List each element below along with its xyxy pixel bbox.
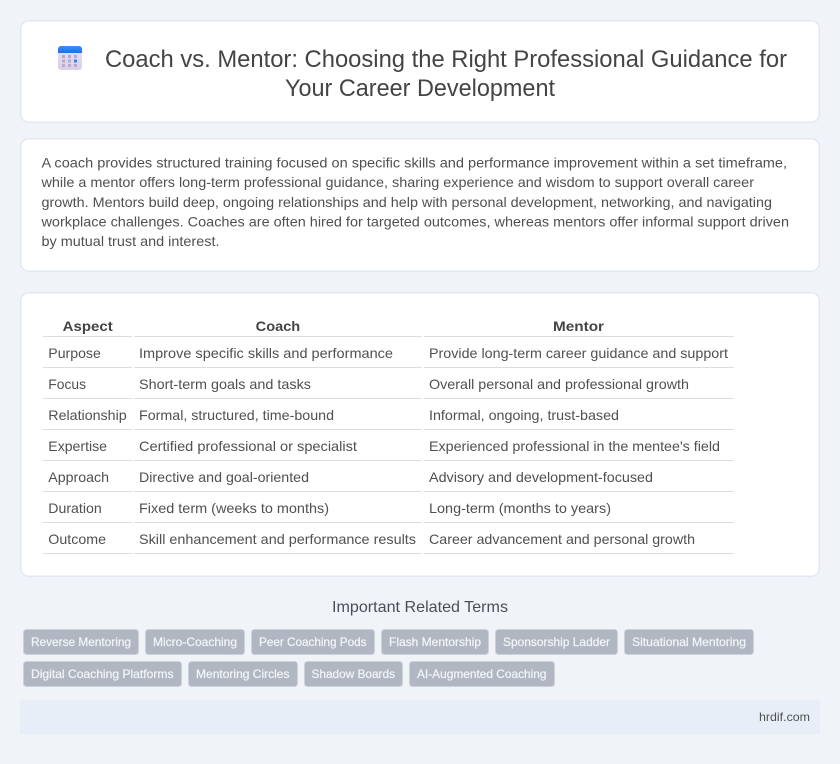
table row: focus	[48, 376, 689, 392]
table row: duration: Long-term (months to years)	[429, 500, 611, 516]
table row: focus: Short-term goals and tasks	[139, 376, 311, 392]
panel: introduction	[21, 139, 819, 271]
table row: purpose	[48, 345, 728, 361]
table row: expertise: Experienced professional in the mentee's field	[429, 438, 720, 454]
table row: outcome: Skill enhancement and performance results	[139, 531, 416, 547]
table row: purpose: Improve specific skills and performance	[139, 345, 393, 361]
table row: purpose: Purpose	[48, 345, 101, 361]
tag: Mentoring Circles: Mentoring Circles	[196, 667, 290, 681]
heading: Your Career Development	[285, 75, 555, 102]
table row: duration	[48, 500, 611, 516]
text block: summary paragraph: workplace challenges. Coaches are often hired for targeted outcomes, whereas mentors offer informal support driven	[40, 213, 789, 229]
tag: Flash Mentorship: Flash Mentorship	[389, 635, 481, 649]
tag: Situational Mentoring: Situational Mentoring	[632, 635, 746, 649]
table row: expertise: Expertise	[48, 438, 107, 454]
section: related terms	[24, 599, 754, 686]
tag: Micro-Coaching: Micro-Coaching	[153, 635, 237, 649]
heading	[105, 46, 787, 102]
table row: focus: Focus	[48, 376, 86, 392]
panel: comparison table	[21, 293, 819, 576]
table row: approach: Approach	[48, 469, 109, 485]
tag: Mentoring Circles	[188, 662, 298, 686]
table row: relationship	[48, 407, 619, 423]
tag: Reverse Mentoring	[24, 630, 138, 654]
tag: Reverse Mentoring: Reverse Mentoring	[31, 635, 131, 649]
table row: outcome: Outcome	[48, 531, 106, 547]
heading: Coach vs. Mentor: Choosing the Right Professional Guidance for	[105, 46, 787, 73]
table header row: Aspect	[63, 318, 113, 334]
table row: purpose: Provide long-term career guidance and support	[429, 345, 728, 361]
table row: relationship: Formal, structured, time-bound	[139, 407, 334, 423]
tag: Sponsorship Ladder	[496, 630, 618, 654]
text block: summary paragraph	[40, 154, 789, 249]
icon: calendar	[58, 46, 82, 70]
tag: Digital Coaching Platforms: Digital Coaching Platforms	[31, 667, 174, 681]
tag: Shadow Boards	[304, 662, 402, 686]
table row: approach: Advisory and development-focused	[429, 469, 653, 485]
footer source text: hrdif.com	[759, 710, 810, 724]
panel: title card	[21, 21, 819, 122]
text block: summary paragraph: by mutual trust and interest.	[42, 233, 220, 249]
tag: AI-Augmented Coaching: AI-Augmented Coaching	[417, 667, 546, 681]
text block: summary paragraph: A coach provides structured training focused on specific skills and performance improvement within a set timeframe,	[42, 154, 787, 170]
table row: approach: Directive and goal-oriented	[139, 469, 309, 485]
table row: approach	[48, 469, 653, 485]
tag: Peer Coaching Pods: Peer Coaching Pods	[259, 635, 366, 649]
table row: outcome	[48, 531, 695, 547]
text block: summary paragraph: growth. Mentors build deep, ongoing relationships and help with personal development, networking, and navigating	[42, 194, 772, 210]
table row: duration: Duration	[48, 500, 102, 516]
table row: expertise: Certified professional or specialist	[139, 438, 357, 454]
table header row: Mentor	[553, 318, 605, 334]
heading: related terms: Important Related Terms	[332, 599, 508, 616]
table row: expertise	[48, 438, 720, 454]
table header row: Coach	[256, 318, 300, 334]
table header row	[63, 318, 605, 334]
table row: relationship: Informal, ongoing, trust-based	[429, 407, 619, 423]
table row: outcome: Career advancement and personal growth	[429, 531, 695, 547]
tag: AI-Augmented Coaching	[410, 662, 554, 686]
footer bar	[20, 700, 820, 734]
tag: Peer Coaching Pods	[252, 630, 374, 654]
tag: Sponsorship Ladder: Sponsorship Ladder	[503, 635, 610, 649]
tag: Shadow Boards: Shadow Boards	[312, 667, 395, 681]
tag: Micro-Coaching	[146, 630, 244, 654]
table row: focus: Overall personal and professional growth	[429, 376, 689, 392]
tag: Digital Coaching Platforms	[24, 662, 182, 686]
table row: relationship: Relationship	[48, 407, 127, 423]
text block: summary paragraph: while a mentor offers long-term professional guidance, sharing experience and wisdom to support overall career	[40, 174, 754, 190]
table row: duration: Fixed term (weeks to months)	[139, 500, 329, 516]
tag: Situational Mentoring	[624, 630, 754, 654]
tag: Flash Mentorship	[382, 630, 488, 654]
